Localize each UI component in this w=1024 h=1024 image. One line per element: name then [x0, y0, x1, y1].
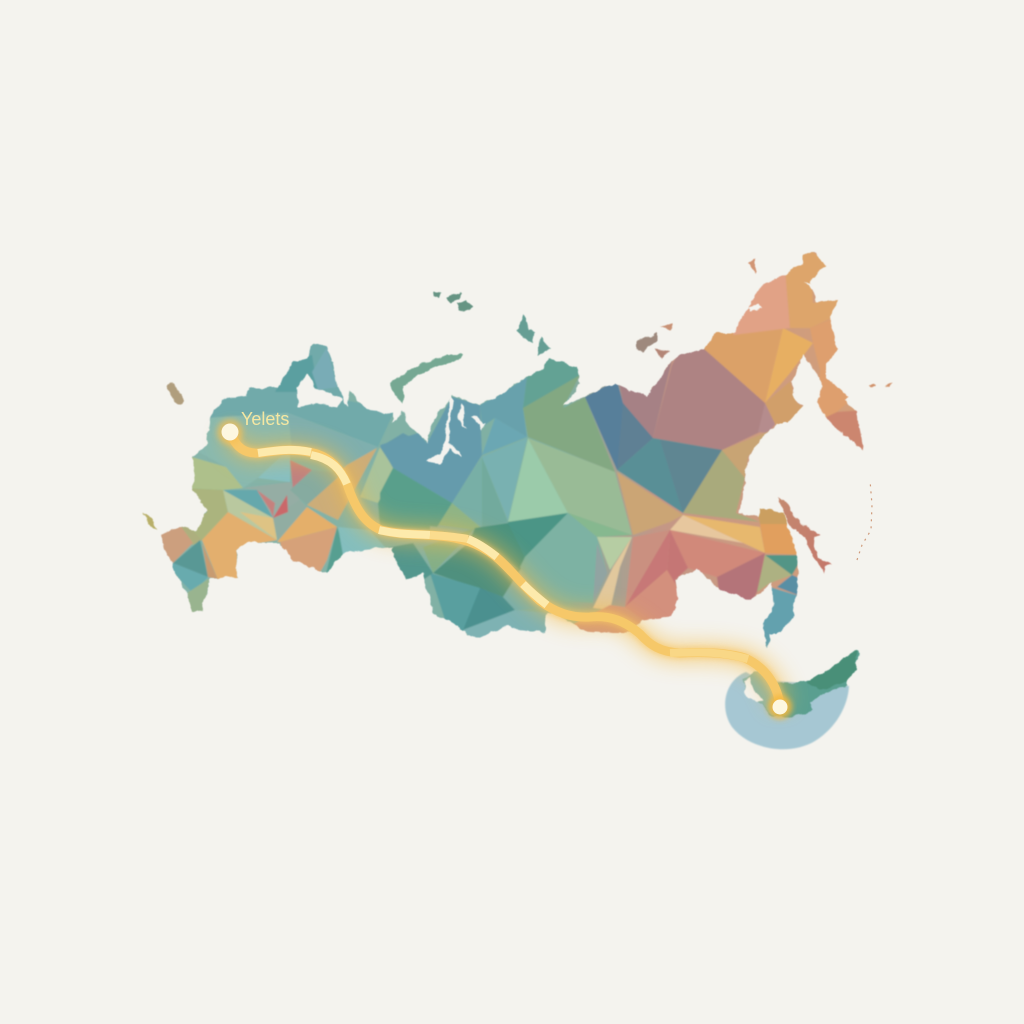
route base line: [230, 432, 780, 707]
start marker: Yelets: [217, 419, 243, 445]
western facets: [155, 335, 430, 618]
label: Yelets: Yelets: [241, 409, 289, 429]
end marker: [768, 695, 792, 719]
route highlight segments: [258, 450, 748, 659]
kuril dots: [857, 480, 872, 560]
route outer glow: [230, 432, 780, 707]
mainland facets: [160, 251, 864, 648]
map: low-poly country: [130, 240, 890, 749]
southern island land: [743, 650, 860, 717]
route: glowing path from Yelets to the southern tip: [230, 432, 780, 707]
northern islands: [143, 258, 890, 530]
white sea and northern inlets: [297, 282, 818, 465]
central facets: [375, 350, 632, 644]
eastern facets: [572, 246, 868, 655]
sea disc around the southern tip: [725, 672, 849, 749]
route inner glow: [230, 432, 780, 707]
eastern island: [778, 497, 832, 573]
